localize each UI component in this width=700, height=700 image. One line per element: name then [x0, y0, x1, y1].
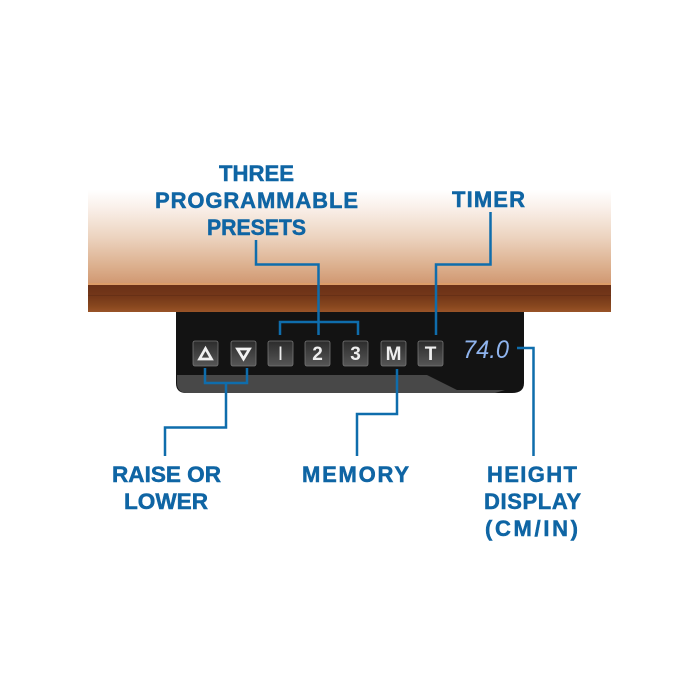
button: memory: M: [386, 344, 401, 365]
label: raise or lower: LOWER: [124, 489, 208, 514]
button: memory: [381, 341, 406, 366]
button: raise: [193, 341, 218, 366]
control panel: [176, 312, 524, 393]
label: three programmable presets: PRESETS: [207, 215, 306, 240]
label: three programmable presets: [155, 161, 358, 240]
label: memory: MEMORY: [302, 462, 409, 487]
panel grey strip: [177, 375, 505, 393]
connector: raise or lower: [165, 368, 247, 456]
button: preset 3: 3: [350, 344, 361, 365]
connector: timer: [436, 212, 490, 335]
label: three programmable presets: PROGRAMMABLE: [155, 188, 358, 213]
connector: height display: [517, 348, 534, 456]
label: height display: HEIGHT: [487, 462, 578, 487]
label: height display: (CM/IN): [485, 516, 578, 541]
button: lower: [231, 341, 256, 366]
height readout: 74.0: [463, 336, 509, 364]
desktop surface: [88, 190, 611, 312]
button: preset 2: [305, 341, 330, 366]
button: preset 1: I: [278, 344, 283, 365]
connector: memory: [357, 369, 397, 456]
button: timer: T: [425, 344, 437, 365]
label: raise or lower: RAISE OR: [112, 462, 221, 487]
button: timer: [418, 341, 443, 366]
button: preset 1: [268, 341, 293, 366]
connector: presets: [256, 240, 358, 335]
label: raise or lower: [112, 462, 221, 514]
label: three programmable presets: THREE: [219, 161, 294, 186]
label: timer: TIMER: [452, 187, 525, 212]
button: preset 2: 2: [312, 344, 323, 365]
label: height display: DISPLAY: [484, 489, 581, 514]
button: preset 3: [343, 341, 368, 366]
label: height display: [484, 462, 581, 541]
